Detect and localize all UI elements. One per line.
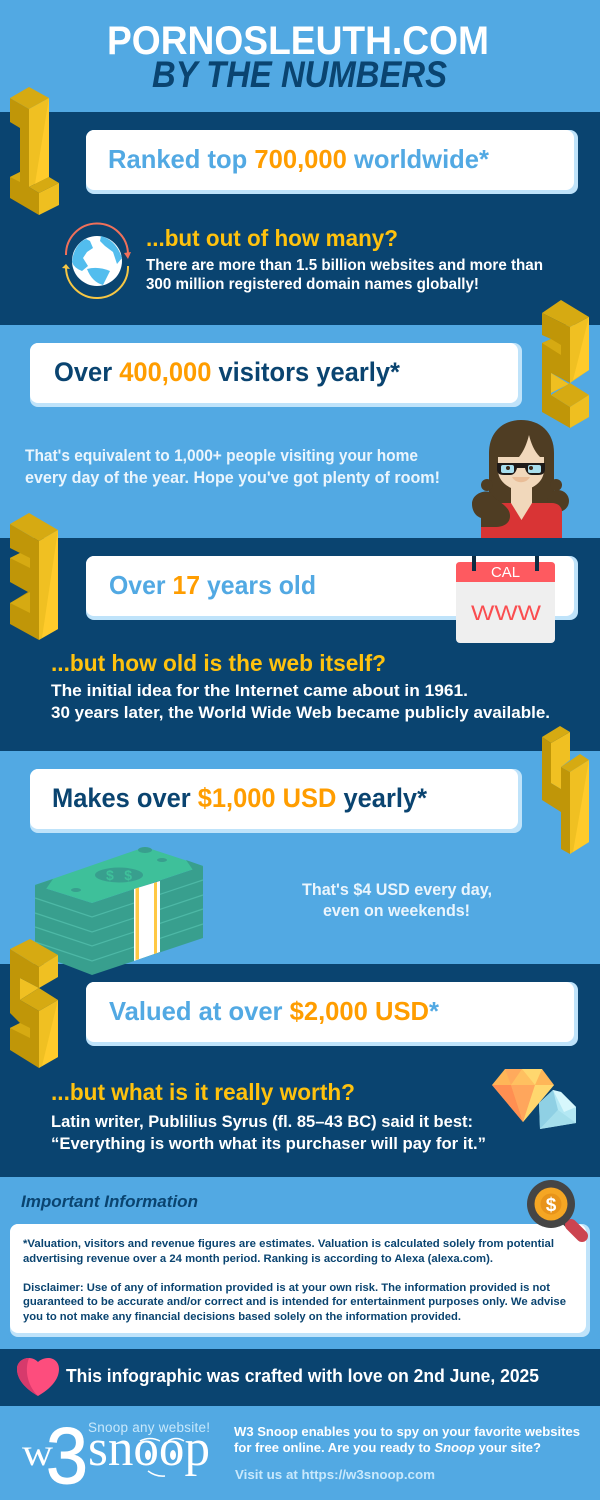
text: quote: Latin writer, Publilius Syrus (fl. 85–43 BC) said it best: — [51, 1113, 473, 1131]
panel: visitors — [0, 300, 600, 538]
card: ranked: Ranked top 700,000 worldwide* — [108, 144, 490, 174]
card: disclaimer: advertising revenue over a 24 month period. Ranking is according to Alexa (alexa.com). — [23, 1253, 493, 1265]
icon: stack of money — [35, 847, 203, 975]
subtitle: BY THE NUMBERS — [152, 54, 447, 95]
logo: w3snoop: Snoop any website! — [88, 1420, 210, 1435]
text: about w3 snoop: for free online. Are you ready to Snoop your site? — [234, 1440, 541, 1455]
text: crafted: This infographic was crafted with love on 2nd June, 2025 — [66, 1366, 539, 1386]
panel: header — [0, 0, 600, 112]
card: valued: Valued at over $2,000 USD* — [109, 996, 440, 1026]
panel: important information — [0, 1177, 600, 1349]
icon: globe — [62, 224, 131, 298]
icon: calendar: CAL — [491, 564, 520, 581]
panel: footer — [0, 1406, 600, 1500]
text: per day: even on weekends! — [323, 902, 470, 920]
card: visitors: Over 400,000 visitors yearly* — [54, 357, 400, 387]
title: PORNOSLEUTH.COM — [107, 19, 489, 63]
text: quote — [51, 1113, 486, 1153]
text: websites — [146, 257, 543, 293]
card: visitors — [30, 343, 522, 407]
card: disclaimer: guaranteed to be accurate and/or correct and is intended for entertainment purposes only. We advise — [23, 1296, 566, 1308]
icon: number 5 — [10, 939, 58, 1068]
card: age: Over 17 years old — [109, 570, 316, 600]
card: age — [86, 556, 578, 620]
text: per day: That's $4 USD every day, — [302, 881, 492, 899]
logo: w3snoop: snoop — [88, 1420, 210, 1477]
icon: number 1 — [10, 87, 59, 215]
logo: w3snoop: w — [22, 1432, 54, 1474]
heading: worth: ...but what is it really worth? — [51, 1079, 355, 1105]
icon: calendar — [456, 556, 555, 643]
card: revenue — [30, 769, 522, 833]
text: internet history — [51, 682, 550, 722]
card: disclaimer: *Valuation, visitors and revenue figures are estimates. Valuation is calculated solely from potential — [23, 1238, 554, 1250]
text: websites: There are more than 1.5 billion websites and more than — [146, 257, 543, 274]
heading: web age: ...but how old is the web itself? — [51, 650, 386, 676]
panel: revenue — [0, 726, 600, 975]
text: quote: “Everything is worth what its purchaser will pay for it.” — [51, 1135, 486, 1153]
logo: w3snoop: 3 — [46, 1411, 88, 1500]
card: revenue: Makes over $1,000 USD yearly* — [52, 783, 427, 813]
card: disclaimer — [10, 1224, 590, 1337]
icon: stack of money: $$ — [106, 867, 132, 883]
icon: calendar: WWW — [471, 602, 541, 625]
icon: number 2 — [542, 300, 589, 428]
link: visit us: Visit us at https://w3snoop.com — [235, 1467, 435, 1482]
text: internet history: The initial idea for the Internet came about in 1961. — [51, 682, 468, 700]
heading: important information: Important Information — [21, 1192, 198, 1211]
panel: crafted with love — [0, 1349, 600, 1406]
panel: valuation — [0, 964, 600, 1177]
text: equivalent: That's equivalent to 1,000+ people visiting your home — [25, 447, 418, 465]
text: about w3 snoop — [234, 1424, 580, 1455]
text: per day — [302, 881, 492, 920]
card: ranked — [86, 130, 578, 194]
text: internet history: 30 years later, the World Wide Web became publicly available. — [51, 704, 550, 722]
text: about w3 snoop: W3 Snoop enables you to spy on your favorite websites — [234, 1424, 580, 1439]
icon: diamonds — [492, 1069, 576, 1129]
card: disclaimer: Disclaimer: Use of any of information provided is at your own risk. The information provided is not — [23, 1282, 550, 1294]
icon: heart — [17, 1358, 59, 1396]
icon: magnifier with dollar — [527, 1180, 582, 1236]
card: disclaimer: you to not make any financial decisions based solely on the information provided. — [23, 1311, 461, 1323]
panel: age — [0, 513, 600, 751]
icon: number 3 — [10, 513, 58, 640]
text: websites: 300 million registered domain names globally! — [146, 276, 479, 293]
icon: magnifier with dollar: $ — [546, 1195, 557, 1216]
text: equivalent: every day of the year. Hope you've got plenty of room! — [25, 469, 440, 487]
logo: w3snoop — [22, 1411, 210, 1500]
text: equivalent — [25, 447, 440, 487]
panel: rank — [0, 87, 600, 325]
icon: number 4 — [542, 726, 589, 854]
heading: out of how many: ...but out of how many? — [146, 225, 398, 251]
icon: woman with glasses — [472, 420, 569, 538]
card: valued — [86, 982, 578, 1046]
